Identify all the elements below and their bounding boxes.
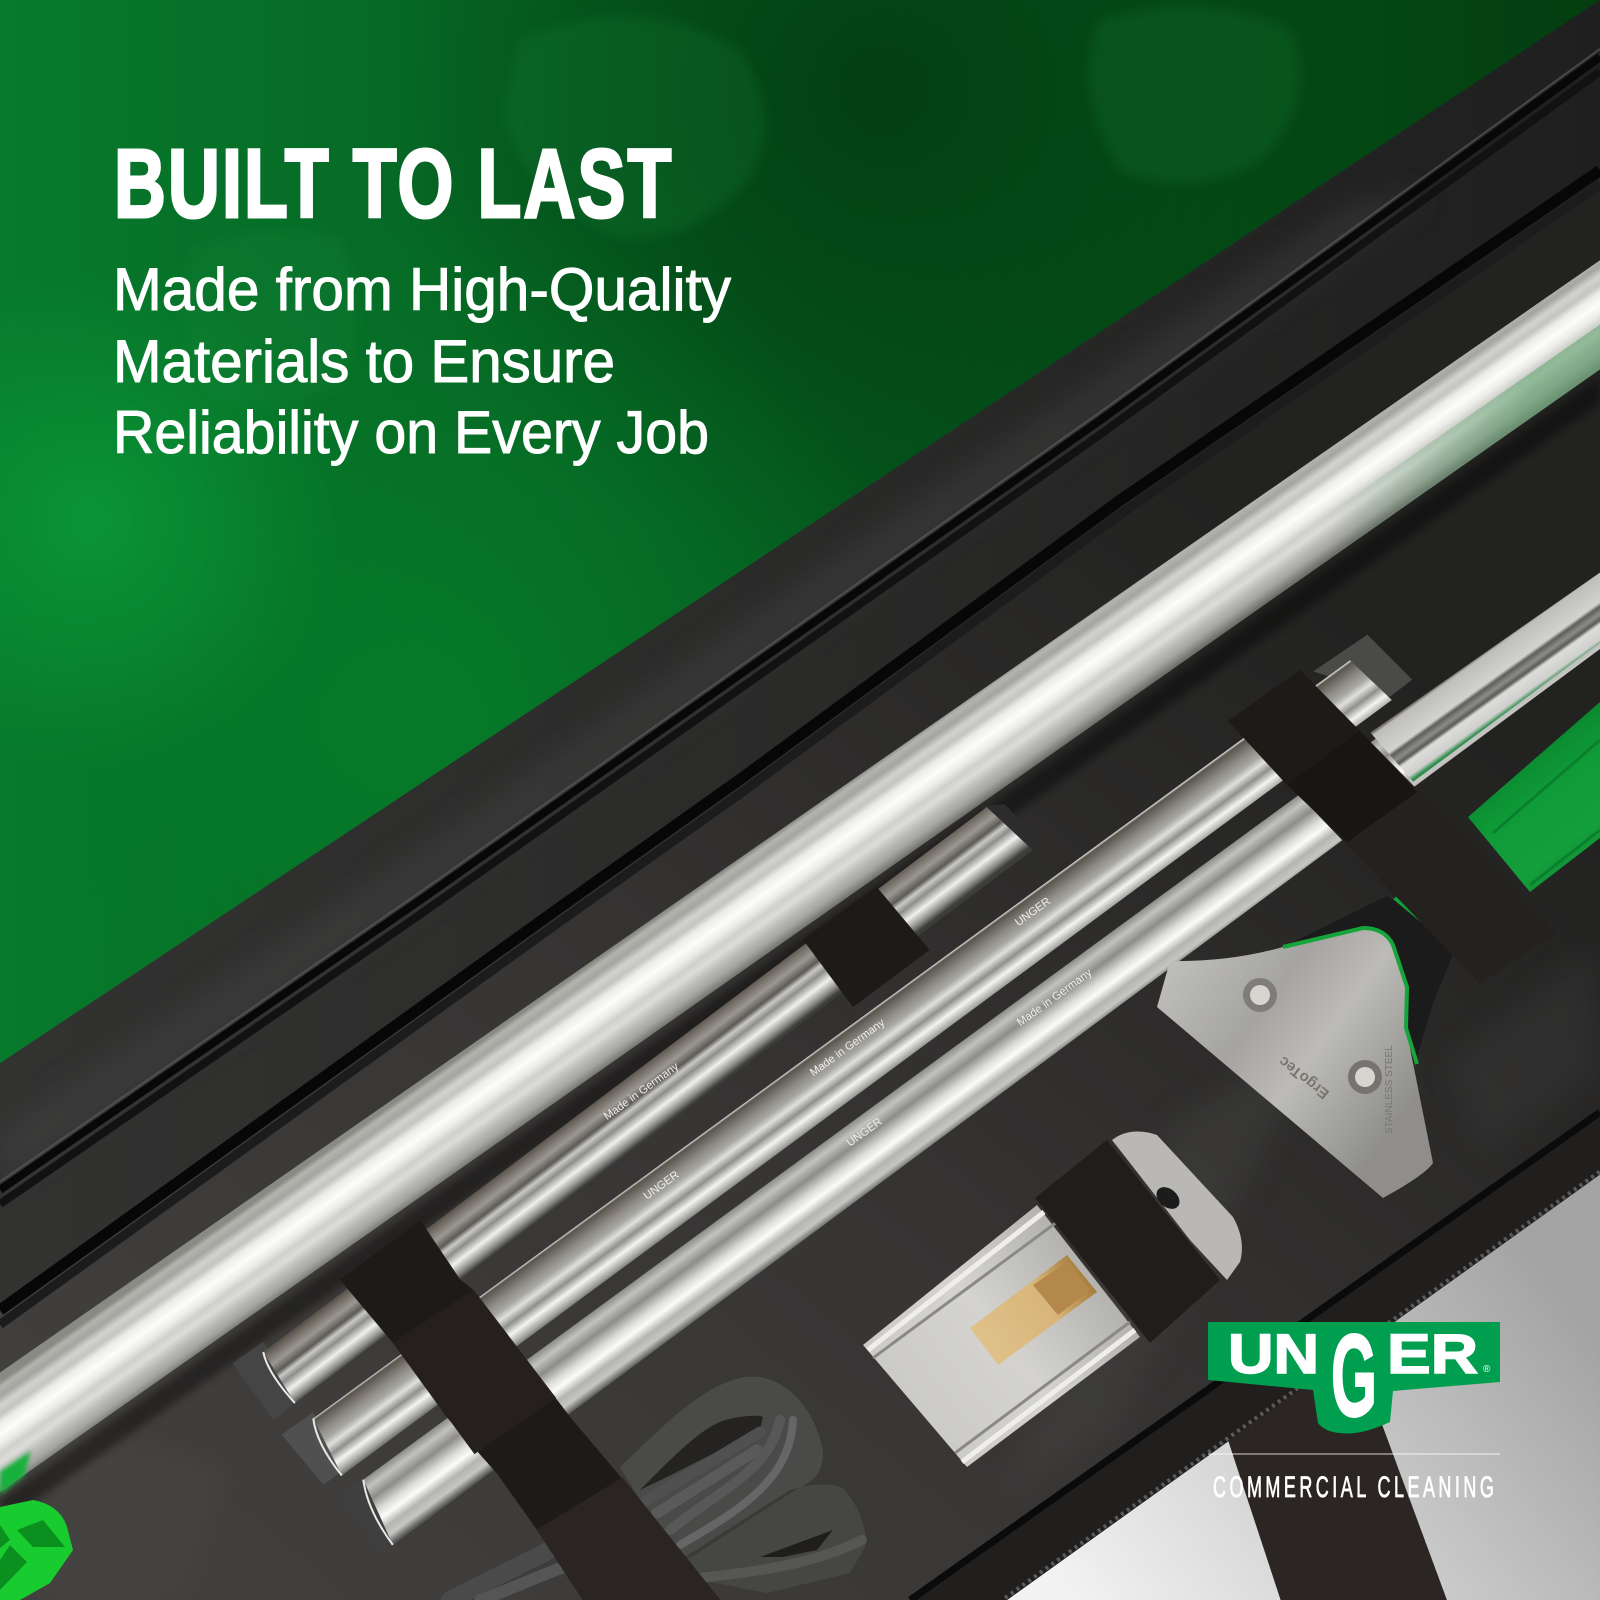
upper zipper seam bbox=[0, 49, 1600, 1204]
subheading text block: Made from High-Quality bbox=[113, 256, 731, 323]
logo wordmark bbox=[1228, 1310, 1491, 1441]
green grip band bbox=[1393, 890, 1445, 938]
pole rubber end bbox=[340, 1478, 396, 1548]
etched text pole: UNGER bbox=[845, 1116, 885, 1149]
green blurred background bbox=[0, 0, 1600, 1100]
shadow under pole bbox=[0, 378, 1600, 1525]
green bumper cap bbox=[0, 1500, 73, 1600]
ergotec scraper head bbox=[1157, 890, 1452, 1198]
squeegee channel long: Made in Germany bbox=[808, 1017, 887, 1079]
right elastic strap bbox=[1228, 670, 1557, 984]
squeegee channel long: UNGER bbox=[1013, 895, 1053, 929]
loop two bbox=[687, 1485, 865, 1593]
scraper metal body bbox=[863, 1205, 1140, 1467]
scraper tab bbox=[1112, 1131, 1242, 1280]
unger logo bbox=[1208, 1310, 1500, 1441]
squeegee channel short bbox=[233, 804, 1039, 1420]
black grip bbox=[1283, 896, 1452, 1064]
flap fold highlight bbox=[0, 194, 1429, 1184]
head stainless engraving: STAINLESS STEEL bbox=[1384, 1045, 1395, 1134]
left elastic strap bbox=[340, 1220, 720, 1600]
subheading text block: Reliability on Every Job bbox=[113, 399, 709, 466]
logo green badge bbox=[1208, 1322, 1500, 1434]
scraper strap bbox=[1035, 1140, 1220, 1343]
lower zipper seam bbox=[0, 170, 1600, 1324]
etched text short channel: Made in Germany bbox=[602, 1060, 681, 1123]
scraper rails bbox=[873, 1222, 1130, 1453]
subheading text block: Materials to Ensure bbox=[113, 328, 615, 395]
channel short rubber ends bbox=[233, 1342, 298, 1420]
logo wordmark: UN bbox=[1228, 1322, 1319, 1385]
channel long rubber ends bbox=[282, 1412, 345, 1485]
middle elastic strap bbox=[803, 887, 930, 1007]
fabric folds bbox=[31, 949, 1600, 1600]
green trim bbox=[1283, 928, 1417, 1064]
razor scraper tool bbox=[863, 1131, 1242, 1467]
grey backdrop bottom right bbox=[918, 1122, 1600, 1600]
subheading text block bbox=[113, 256, 731, 466]
etched text long channel: UNGER bbox=[642, 1169, 681, 1202]
stainless head bbox=[1157, 928, 1433, 1198]
rubber blade loops bbox=[450, 1377, 865, 1600]
pole section with channel: Made in Germany bbox=[1015, 967, 1095, 1029]
pole upper right section bbox=[1370, 572, 1600, 782]
screw one bbox=[1243, 978, 1277, 1012]
channel long metal bbox=[313, 660, 1392, 1475]
squeegee channel long bbox=[282, 635, 1412, 1485]
green reflection on pole bbox=[1327, 324, 1600, 561]
scraper brass window bbox=[970, 1255, 1097, 1365]
cap recesses bbox=[0, 1520, 65, 1590]
commercial cleaning tagline: COMMERCIAL CLEANING bbox=[1213, 1472, 1497, 1504]
logo divider bbox=[1208, 1454, 1500, 1455]
logo wordmark: ® bbox=[1483, 1364, 1491, 1375]
head engraving: ErgoTec bbox=[1276, 1053, 1332, 1102]
screw two bbox=[1348, 1060, 1382, 1094]
pole metal bbox=[363, 574, 1600, 1545]
green pole handle bbox=[1468, 702, 1600, 892]
rubber strands bbox=[450, 1420, 862, 1600]
aluminium extension pole bbox=[0, 260, 1600, 1495]
bag bottom rim bbox=[910, 1112, 1600, 1600]
channel short metal bbox=[263, 807, 1033, 1403]
logo wordmark: ER bbox=[1387, 1322, 1478, 1385]
loop one bbox=[620, 1377, 823, 1560]
brass rib bbox=[1033, 1262, 1090, 1315]
logo wordmark: G bbox=[1331, 1310, 1377, 1441]
pole section with channel bbox=[340, 572, 1600, 1548]
heading: built to last: BUILT TO LAST bbox=[114, 131, 673, 239]
scraper hole bbox=[1152, 1183, 1184, 1213]
carry strap webbing bbox=[1204, 1357, 1447, 1600]
